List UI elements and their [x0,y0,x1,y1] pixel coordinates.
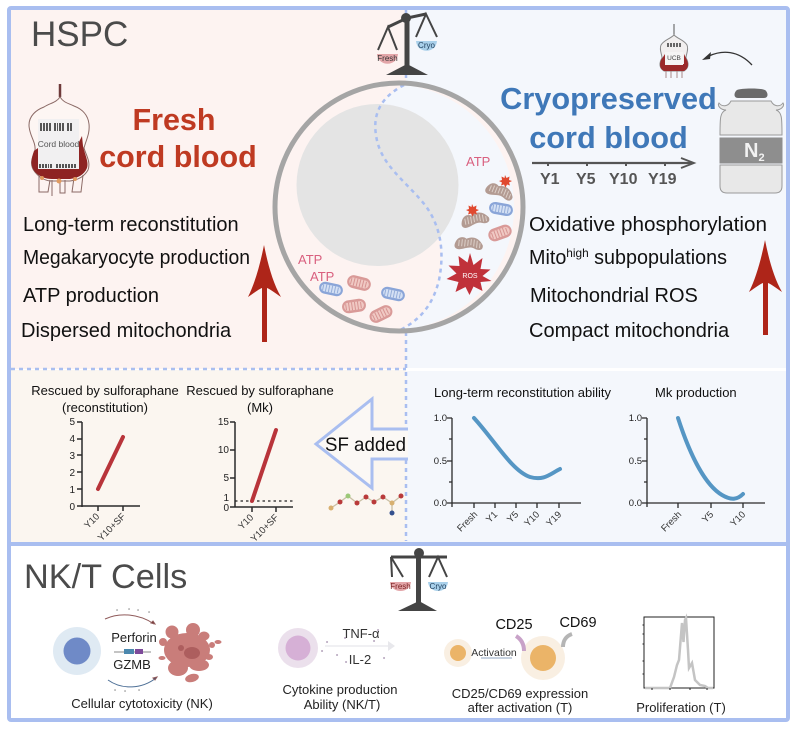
chart: rescued by sulforaphane (reconstitution): (reconstitution) [62,400,148,415]
timeline: Y1 [540,171,560,188]
icon: balance scale, balanced [390,548,448,611]
label: ATP fresh side: ATP [310,269,334,284]
timeline: Y10 [609,171,638,188]
chart: rescued by sulforaphane (Mk): (Mk) [247,400,273,415]
text: cryopreserved features: subpopulations [589,247,727,269]
chart: rescued by sulforaphane (reconstitution): Y10 [82,511,102,531]
chart: long-term reconstitution ability: Y10 [522,509,542,529]
text: fresh cord blood features [21,214,250,342]
chart: rescued by sulforaphane (reconstitution): 0 [69,502,75,513]
text: cryopreserved features: Oxidative phosphorylation [529,214,767,236]
icon: ROS burst [446,253,492,295]
panel item: cytokine production [278,626,397,712]
labels: CD25, CD69 [495,615,597,633]
chart: long-term reconstitution ability: Y5 [505,509,521,525]
chart: rescued by sulforaphane (Mk): Rescued by sulforaphane [186,383,334,398]
chart: long-term reconstitution ability [434,385,612,534]
chart: rescued by sulforaphane (reconstitution): 4 [69,434,75,445]
panel: sulforaphane rescue background [9,370,406,542]
chart: rescued by sulforaphane (Mk): 15 [218,417,229,428]
chart: rescued by sulforaphane (Mk): 0 [223,503,229,514]
diagram: hematopoietic stem cell [275,83,523,331]
mitochondria: dispersed [318,274,406,325]
text: TNF-α, IL-2 [342,626,380,667]
chart: proliferation histogram [642,617,714,690]
chart: long-term reconstitution ability: 1.0 [434,413,447,424]
icon: lysed target cell [158,623,222,684]
chart: rescued by sulforaphane (reconstitution): Rescued by sulforaphane [31,383,179,398]
panel: NK/T cells background [9,545,788,720]
heading: HSPC: HSPC [31,15,128,54]
icon: liquid nitrogen tank [718,88,784,193]
arrow: tank to bag [702,52,752,65]
label: ATP fresh side: ATP [298,252,322,267]
chart: long-term reconstitution ability: Y1 [484,509,500,525]
chart: rescued by sulforaphane (reconstitution): 2 [69,468,75,479]
chart: Mk production: 0.5 [629,456,642,467]
chart: rescued by sulforaphane (Mk): 10 [218,445,229,456]
chart: Mk production: Y10 [728,509,748,529]
panel: decline charts background [406,371,788,542]
chart: rescued by sulforaphane (reconstitution) [31,383,179,544]
chart: Mk production: Y5 [700,509,716,525]
text: Perforin, GZMB: Perforin [111,630,157,645]
chart: long-term reconstitution ability: 0.5 [434,456,447,467]
icon: fresh cord blood bag: Cord blood [38,139,80,149]
icon: balance scale, balanced: Fresh [390,582,411,591]
label: ATP cryo side: ATP [466,154,490,169]
text: Perforin, GZMB: GZMB [113,657,151,672]
icon: balance scale, fresh vs cryo: Fresh [377,54,398,63]
text: fresh cord blood features: Long-term reconstitution [23,214,239,236]
icon: small UCB bag: UCB [667,55,681,62]
icon: sulforaphane molecule [328,494,404,516]
chart: Mk production: Mk production [655,385,737,400]
arrows: cytotoxic granules [105,609,157,691]
text: TNF-α, IL-2: TNF-α [342,626,380,641]
arrow: activation: Activation [471,647,517,659]
chart: rescued by sulforaphane (Mk): 5 [223,473,229,484]
label: ATP fresh side [298,252,334,284]
icon: granule molecule [114,649,151,654]
icon: cytokine-secreting cell [278,628,318,668]
chart: Mk production: Fresh [659,509,684,534]
icon: balance scale, balanced: Cryo [430,582,447,591]
caption: cytokine production: Cytokine production [283,682,397,697]
heading: fresh cord blood: Fresh [132,103,216,137]
caption: cellular cytotoxicity: Cellular cytotoxicity (NK) [71,696,213,711]
text: TNF-α, IL-2: IL-2 [349,652,371,667]
heading: fresh cord blood: cord blood [99,140,257,174]
icon: fresh cord blood bag [29,84,89,196]
timeline [532,158,694,188]
chart: rescued by sulforaphane (Mk): Y10 [236,512,256,532]
icon: liquid nitrogen tank: N [744,140,758,162]
text: fresh cord blood features: Megakaryocyte production [23,247,250,269]
panel item: CD25/CD69 expression [444,615,597,715]
chart: Mk production: 0.0 [629,498,642,509]
text: fresh cord blood features: Dispersed mitochondria [21,320,232,342]
heading: cryopreserved cord blood: Cryopreserved [500,81,717,116]
heading: NK/T Cells: NK/T Cells [24,558,187,596]
icon: activated T cell [516,634,572,680]
text: fresh cord blood features: ATP production [23,285,159,307]
caption: proliferation: Proliferation (T) [636,700,726,715]
chart: rescued by sulforaphane (reconstitution): Y10+SF [96,511,128,544]
caption: CD25/CD69: CD25/CD69 expression [452,686,588,701]
heading: cryopreserved cord blood: cord blood [529,120,688,155]
caption: CD25/CD69: after activation (T) [468,700,572,715]
arrow: SF added: SF added [325,434,406,456]
panel item: cellular cytotoxicity [53,609,222,711]
icon: balance scale, fresh vs cryo [377,13,437,75]
chart: rescued by sulforaphane (reconstitution): 3 [69,451,75,462]
chart: long-term reconstitution ability: Long-term reconstitution ability [434,385,612,400]
arrow: increase, fresh [248,245,281,342]
chart: rescued by sulforaphane (Mk): Y10+SF [249,512,281,545]
text: cryopreserved features: Compact mitochondria [529,320,730,342]
labels: CD25, CD69: CD25 [495,617,533,633]
chart: rescued by sulforaphane (Mk) [186,383,334,545]
icon: small UCB bag [660,24,688,78]
chart: Mk production: 1.0 [629,413,642,424]
icon: liquid nitrogen tank: 2 [758,152,765,164]
icon: ROS burst: ROS [462,273,478,280]
labels: CD25, CD69: CD69 [559,615,597,631]
text: cryopreserved features [529,214,767,342]
chart: long-term reconstitution ability: Y19 [544,509,564,529]
text: Perforin, GZMB [111,630,157,672]
timeline: Y19 [648,171,677,188]
chart: long-term reconstitution ability: 0.0 [434,498,447,509]
icon: NK cell [53,627,101,675]
text: cryopreserved features: Mito [529,247,567,269]
timeline: Y5 [576,171,596,188]
arrow: cytokine secretion [322,630,395,662]
chart: long-term reconstitution ability: Fresh [455,509,480,534]
arrow: SF added [316,399,408,488]
chart: rescued by sulforaphane (Mk): 1 [223,493,229,504]
chart: rescued by sulforaphane (reconstitution): 5 [69,417,75,428]
caption: cytokine production: Ability (NK/T) [304,697,380,712]
panel: fresh cord blood background [9,8,406,369]
icon: balance scale, fresh vs cryo: Cryo [418,41,435,50]
arrow: increase, cryopreserved [749,240,782,335]
icon: resting T cell [444,639,472,667]
text: cryopreserved features: Mitochondrial ROS [530,285,698,307]
text: cryopreserved features: high [566,246,589,260]
chart: rescued by sulforaphane (reconstitution): 1 [69,485,75,496]
panel: cryopreserved cord blood background [406,8,788,368]
mitochondria: compact with ROS damage [454,175,515,252]
chart: Mk production [629,385,765,534]
